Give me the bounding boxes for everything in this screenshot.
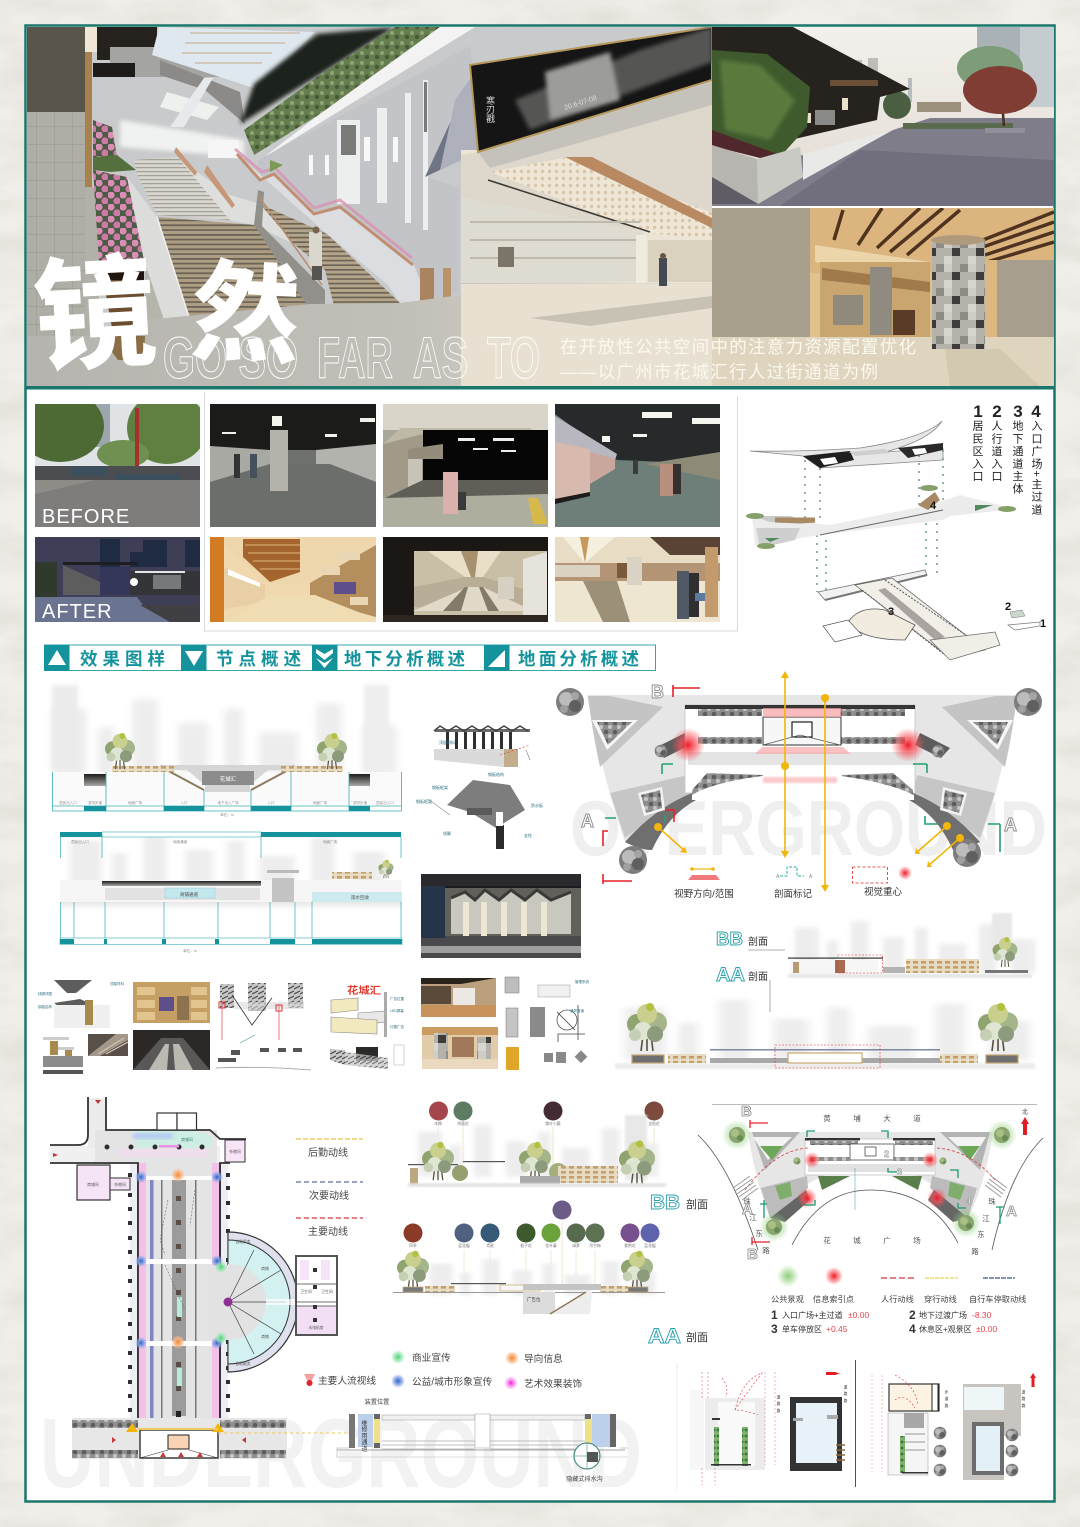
floor — [27, 283, 712, 386]
section markers — [603, 685, 1000, 884]
column photo — [422, 1027, 498, 1069]
central building — [685, 705, 915, 800]
flower planter — [93, 120, 117, 157]
semicircular hall: 自助贩卖 — [235, 1361, 251, 1366]
semicircular hall: 自助贩卖 — [235, 1239, 251, 1244]
planting section AA: 广告位 — [527, 1296, 541, 1303]
road names: 城 — [853, 1236, 861, 1245]
interior walls — [461, 197, 643, 285]
lower layer underground plan — [818, 570, 1046, 660]
zone list: 1 — [771, 1308, 778, 1322]
cross section B — [60, 832, 402, 953]
hero title: 镜然: 然 — [189, 251, 303, 378]
hero subtitle: 在开放性公共空间中的注意力资源配置优化 — [560, 337, 916, 357]
crosswalks — [733, 1176, 1007, 1200]
top side rooms: 商铺间 — [87, 1182, 99, 1187]
plant thumbnails BB: 紫叶小檗 — [545, 1121, 561, 1126]
AA section label (planting) — [648, 1325, 708, 1348]
semicircular hall: 商铺 — [261, 1266, 269, 1271]
bamboo planter — [712, 50, 810, 157]
direction mark — [826, 1372, 840, 1375]
signage kiosk diagrams: 管理系统 — [575, 979, 589, 984]
overground plan — [556, 671, 1042, 900]
BB section label (planting) — [650, 1192, 708, 1214]
canopy node detail: 钢板框架 — [432, 784, 448, 790]
road names: 珠 — [988, 1196, 996, 1206]
tab navigation — [44, 645, 656, 671]
legend: section mark: A — [809, 874, 813, 880]
entrance plan left — [677, 1363, 848, 1490]
legend: section mark: 剖面标记 — [774, 888, 812, 900]
roof plan: 道路路 — [1021, 1389, 1026, 1410]
detail group: signage — [330, 984, 404, 1069]
detail group: pavilion axon and photos — [38, 980, 210, 1074]
AA section label (planting): 剖面 — [686, 1330, 708, 1344]
wall — [258, 46, 473, 303]
detail group: signage: 广告位置 — [390, 996, 404, 1001]
hero divider — [26, 386, 1054, 390]
photo: before street — [35, 404, 200, 528]
legend 3: 地下通道主体 — [1011, 420, 1024, 496]
site plan — [698, 1103, 1043, 1263]
middle layer plaza — [746, 485, 1016, 549]
hero outlined English title — [163, 326, 540, 391]
signage glows — [135, 1145, 227, 1349]
cross section B: 单位：m — [183, 948, 197, 953]
section markers — [750, 1120, 1004, 1245]
tab: node overview — [181, 645, 306, 671]
site central building: 3 — [897, 1167, 902, 1177]
cross section A: 地面广场 — [128, 800, 142, 805]
tab: ground analysis: 地面分析概述 — [518, 649, 642, 669]
section letters: A — [1004, 815, 1017, 835]
zone list: ±0.00 — [976, 1324, 997, 1334]
legend: section mark: A — [776, 874, 780, 880]
detail group: signage: 灯箱广告 — [390, 1024, 404, 1029]
legend 4: 4 — [1031, 402, 1041, 421]
hero: stair and concourse rendering: 20.6-07-08 — [563, 95, 598, 112]
legend: art decoration — [504, 1376, 582, 1390]
section letters: A — [581, 811, 594, 831]
legend 1: 1 — [973, 402, 983, 421]
legend: pedestrian flow: 人行动线 — [881, 1294, 914, 1304]
legend 2: 2 — [992, 402, 1002, 421]
dark foliage — [240, 27, 395, 124]
cross section A: 居民出入口 — [376, 800, 394, 805]
planter rail — [237, 154, 430, 303]
signage kiosk diagrams — [505, 977, 589, 1070]
site section letters — [741, 1103, 1017, 1263]
plant thumbnails AA: 花叶蔓 — [545, 1243, 557, 1248]
middle layer plaza: 4 — [930, 500, 937, 512]
hero outlined English title: TO — [487, 326, 540, 391]
left wall — [27, 27, 85, 112]
road names: 黄 — [823, 1113, 831, 1123]
plant thumbnails AA: 栀子花 — [520, 1243, 532, 1248]
legend 1: 居民区入口 — [971, 420, 984, 483]
machine rooms: 卫生间 — [321, 1289, 333, 1294]
lower layer underground plan: 3 — [888, 606, 894, 618]
legend: public welfare — [391, 1374, 493, 1388]
BB section label (overground): 剖面 — [748, 935, 768, 948]
photo: after night view — [35, 537, 200, 623]
hero: plaza canopy rendering — [712, 27, 1054, 206]
corridor strips — [137, 1163, 221, 1420]
north mark — [1030, 1373, 1036, 1387]
bottom cross street — [72, 1418, 352, 1459]
zone list: 4 — [909, 1322, 916, 1336]
paving — [712, 118, 1054, 206]
info index points — [797, 1152, 947, 1208]
road names: 江 — [982, 1214, 990, 1223]
pavilion exploded view: 顶部材料 — [110, 981, 124, 986]
pavilion exploded view: 线脚详图 — [38, 991, 52, 996]
photo: corridor before — [555, 404, 720, 527]
zone list: 3 — [771, 1322, 778, 1336]
flow legend: main — [296, 1218, 363, 1238]
cross section A: 滨河步道 — [88, 800, 102, 805]
plant thumbnails AA: 绿萝 — [572, 1243, 580, 1248]
canopy — [712, 27, 910, 140]
flow marker arrows — [53, 1100, 101, 1157]
legend 2: 人行道入口 — [990, 420, 1002, 483]
zone list: -8.30 — [972, 1310, 992, 1320]
cross section B: 地面广场 — [323, 839, 337, 844]
zone list: 地下过渡广场 — [919, 1310, 967, 1320]
entrance plan right — [872, 1373, 1036, 1480]
plant thumbnails AA — [404, 1200, 660, 1285]
section letters — [581, 682, 1017, 835]
site trees — [722, 1120, 1017, 1242]
ceiling and atrium — [97, 27, 157, 60]
legend: public landscape: 公共景观 — [771, 1295, 804, 1304]
site central building — [805, 1138, 971, 1206]
drain detail callout — [566, 1443, 603, 1483]
legend: guidance — [505, 1351, 563, 1365]
cross section A: 地面广场 — [313, 800, 327, 805]
north arrow: 北 — [1022, 1108, 1028, 1116]
hero outlined English title: AS — [413, 326, 468, 391]
top layer roof plan — [750, 421, 943, 468]
AA section drawing — [615, 1000, 1035, 1069]
hero subtitle — [560, 337, 916, 382]
detail group: photos and signs — [421, 977, 589, 1070]
hero title: 镜然: 镜 — [31, 245, 160, 387]
road names: 珠 — [743, 1196, 751, 1206]
stair photo — [88, 1034, 128, 1056]
plant thumbnails AA: 蓝花楹 — [644, 1243, 656, 1248]
plant thumbnails BB: 木棉 — [434, 1121, 442, 1126]
flow legend: secondary — [296, 1182, 363, 1202]
AA section label (planting): AA — [648, 1325, 681, 1348]
legend: crossing flow — [924, 1278, 958, 1304]
road names: 路 — [762, 1245, 770, 1255]
underground corridor section — [336, 1398, 628, 1483]
road names: 大 — [883, 1113, 891, 1123]
hero subtitle: ——以广州市花城汇行人过街通道为例 — [560, 362, 878, 382]
road names: 花 — [823, 1235, 831, 1245]
canopy node detail: 顶部材料 — [439, 739, 455, 745]
retail photo — [421, 978, 496, 1017]
canopy node detail: 支柱 — [524, 832, 532, 838]
road names: 道 — [913, 1113, 921, 1123]
site section letters: A — [1006, 1203, 1017, 1220]
legend: public landscape — [771, 1265, 804, 1304]
hero: stair and concourse rendering — [27, 27, 712, 386]
tab: ground analysis — [484, 645, 642, 671]
underground plan — [50, 1097, 352, 1459]
zone list: 休息区+观景区 — [919, 1324, 972, 1334]
flow legend: logistics — [296, 1139, 363, 1159]
bird's eye roof plan: 道路路 — [843, 1384, 848, 1405]
legend: guidance: 导向信息 — [524, 1352, 563, 1365]
hero outlined English title: GO SO — [163, 326, 298, 391]
canopy node detail — [416, 726, 543, 849]
legend: commercial: 商业宣传 — [412, 1351, 451, 1364]
visual focus glows — [671, 728, 925, 762]
view direction arrows — [654, 671, 964, 892]
cross section A: 地下出入广场 — [218, 800, 239, 805]
legend: section mark — [774, 867, 813, 900]
plant thumbnails AA: 紫荆花 — [624, 1243, 636, 1248]
road curves — [698, 1135, 1043, 1250]
tab: effect images: 效果图样 — [80, 649, 170, 669]
layer connection lines — [805, 450, 943, 595]
legend 4: 入口广场+主过道 — [1030, 420, 1042, 516]
road names: 埔 — [853, 1113, 861, 1123]
stair hall photo — [133, 1030, 210, 1070]
plant thumbnails AA: 蓝花楹 — [458, 1243, 470, 1248]
legend: commercial — [391, 1350, 451, 1364]
underground corridor section: 维修用通道 — [360, 1419, 367, 1453]
site legend — [771, 1265, 1026, 1336]
plant thumbnails BB — [429, 1102, 664, 1168]
checker column — [932, 240, 985, 349]
plant thumbnails AA: 吊竹梅 — [589, 1243, 601, 1248]
road names: 东 — [977, 1229, 985, 1239]
cross section B: 地面通道 — [173, 839, 187, 844]
road names: 江 — [749, 1213, 757, 1222]
legend: main pedestrian sightline: 主要人流视线 — [318, 1374, 376, 1387]
stair flights — [134, 157, 230, 220]
legend: bicycle flow — [969, 1278, 1026, 1304]
legend: info index: 信息索引点 — [813, 1294, 854, 1304]
canopy node detail: 防水板 — [531, 802, 543, 808]
lower layer underground plan: 1 — [1040, 618, 1046, 630]
column grids — [104, 1144, 230, 1412]
zone list: ±0.00 — [848, 1310, 869, 1320]
site central building: 4 — [966, 1196, 971, 1206]
tab: underground analysis — [312, 645, 468, 671]
signage legend — [304, 1350, 582, 1390]
underground corridor section: 装置位置 — [365, 1398, 389, 1406]
photo: after night view: AFTER — [42, 601, 113, 623]
hero: underground shop rendering — [712, 208, 1054, 386]
tab: underground analysis: 地下分析概述 — [344, 649, 468, 669]
north arrow — [1021, 1108, 1029, 1135]
cross section A: 居民出入口 — [59, 800, 77, 805]
cross section B: 雨水回收 — [351, 894, 369, 901]
semicircular hall: 商铺 — [261, 1334, 269, 1339]
legend: visual focus — [852, 866, 912, 898]
entrance plan right: 步道路 — [944, 1389, 949, 1410]
road names: 路 — [971, 1246, 979, 1256]
site central building: 2 — [884, 1149, 889, 1159]
AA section label (overground) — [716, 965, 770, 1012]
photo: dark hall after — [383, 537, 548, 622]
entrance plan left: 道路路 — [776, 1394, 781, 1415]
watermark UNDERGROUND: UNDERGROUND — [40, 1398, 642, 1508]
bench detail — [43, 1037, 83, 1074]
pavilion exploded view: 钢板结构 — [38, 1004, 52, 1009]
cross section B: 居民出入口 — [71, 839, 89, 844]
BB section drawing — [788, 913, 1035, 978]
brown planter base — [100, 263, 144, 360]
machine rooms — [296, 1256, 337, 1335]
semicircular hall — [208, 1232, 298, 1372]
zone list: 单车停放区 — [782, 1324, 822, 1334]
legend: public welfare: 公益/城市形象宣传 — [412, 1375, 493, 1388]
section letters: B — [651, 682, 664, 702]
roof plan — [963, 1384, 1026, 1480]
photo: dark subway before — [210, 404, 376, 527]
legend: view direction — [674, 867, 734, 900]
AA section label (overground): AA — [716, 965, 745, 986]
canopy node detail: 线脚 — [443, 830, 451, 836]
flow lines — [745, 1148, 995, 1190]
road names — [743, 1113, 996, 1256]
plant thumbnails BB: 鸡蛋花 — [457, 1121, 469, 1126]
top side rooms: 商铺间 — [181, 1137, 193, 1142]
machine rooms: 水电机房 — [308, 1325, 324, 1330]
legend: visual focus: 视觉重心 — [864, 886, 902, 898]
legend: bicycle flow: 自行车停取动线 — [969, 1294, 1026, 1304]
top side rooms: 杂物间 — [229, 1149, 241, 1154]
BB section label (planting): 剖面 — [686, 1197, 708, 1211]
cross section A: 单位：m — [220, 812, 234, 817]
drain detail callout: 隐藏式排水沟 — [566, 1475, 603, 1483]
canopy node detail: 钢板框架 — [416, 798, 432, 804]
zone list — [771, 1308, 997, 1336]
flow legend: logistics: 后勤动线 — [308, 1146, 348, 1159]
legend: art decoration: 艺术效果装饰 — [524, 1377, 582, 1390]
flow legend: main: 主要动线 — [308, 1225, 348, 1238]
background buildings — [917, 102, 961, 112]
BB section label (overground): BB — [716, 929, 743, 949]
machine rooms: 卫生间 — [300, 1289, 312, 1294]
plant thumbnails AA: 鸢尾 — [486, 1243, 494, 1248]
hero outlined English title: FAR — [317, 326, 393, 391]
legend: crossing flow: 穿行动线 — [924, 1294, 957, 1304]
cross section B: 商铺通道 — [180, 891, 198, 898]
site section letters: A — [742, 1201, 753, 1218]
detail group: signage: LED屏幕 — [390, 1008, 404, 1013]
cross section A: 入口 — [268, 800, 275, 805]
red tree — [1001, 90, 1004, 126]
entrance plan divider — [854, 1360, 856, 1487]
photo: tunnel entrance before — [383, 404, 548, 527]
planting section BB — [408, 1102, 666, 1187]
detail group: sight line analysis — [216, 983, 311, 1070]
view range bands — [755, 708, 851, 783]
cross section A: 花城汇 — [220, 775, 237, 783]
floor area — [50, 1098, 228, 1421]
bird's eye roof plan — [790, 1384, 848, 1471]
cross section A — [52, 685, 402, 817]
top side rooms — [77, 1113, 245, 1200]
photo: bright hall after — [555, 537, 720, 622]
dark triangle under ad — [425, 77, 478, 177]
zone list: +0.45 — [826, 1324, 848, 1334]
BB section label (overground) — [716, 929, 785, 950]
interior ceiling — [461, 150, 712, 386]
plan trees — [556, 688, 1042, 874]
legend: pedestrian flow — [881, 1278, 915, 1304]
photo: before street: BEFORE — [42, 506, 130, 528]
pavilion exploded view — [38, 980, 124, 1028]
AA section label (overground): 剖面 — [748, 970, 768, 983]
legend 3: 3 — [1013, 402, 1023, 421]
flow legend: secondary: 次要动线 — [309, 1189, 349, 1202]
tab: effect images — [44, 645, 170, 671]
site section letters: B — [747, 1246, 758, 1263]
shop photo — [133, 982, 210, 1023]
lower layer underground plan: 2 — [1005, 601, 1011, 613]
cross section A: 滨河步道 — [353, 800, 367, 805]
cross section A: 入口 — [180, 800, 188, 805]
legend: info index — [813, 1267, 854, 1304]
hero: stair and concourse rendering: 寒刃戳 — [485, 95, 495, 124]
signage kiosk diagrams: 通风管道 — [570, 1008, 584, 1013]
site section letters: B — [741, 1103, 752, 1120]
plant thumbnails BB: 龙船花 — [648, 1121, 660, 1126]
zone list: 2 — [909, 1308, 916, 1322]
plan base — [587, 695, 1018, 850]
night view of node — [421, 874, 581, 958]
plan walls — [50, 1097, 246, 1418]
advertising screen — [470, 27, 712, 152]
exploded axonometric diagram — [746, 402, 1046, 660]
photo grid frame — [204, 392, 738, 631]
legend: view direction: 视野方向/范围 — [674, 888, 734, 900]
zone list: 入口广场+主过道 — [782, 1310, 843, 1320]
tab: node overview: 节点概述 — [216, 649, 306, 669]
hero title: 镜然 — [31, 245, 303, 387]
detail group: signage: 花城汇 — [347, 984, 381, 997]
top side rooms: 杂物间 — [114, 1182, 126, 1187]
road names: 东 — [755, 1228, 763, 1238]
planting section AA — [393, 1200, 665, 1314]
canopy node detail: 钢板结构 — [488, 771, 504, 777]
BB section label (planting): BB — [650, 1192, 680, 1214]
photo: warm interior after — [210, 537, 376, 622]
road names: 场 — [913, 1236, 921, 1245]
road names: 广 — [883, 1235, 891, 1245]
site fan shape — [748, 1132, 993, 1222]
plant thumbnails AA: 四季 — [409, 1243, 417, 1248]
legend: main pedestrian sightline — [304, 1374, 376, 1387]
perforated ceiling — [490, 157, 712, 240]
